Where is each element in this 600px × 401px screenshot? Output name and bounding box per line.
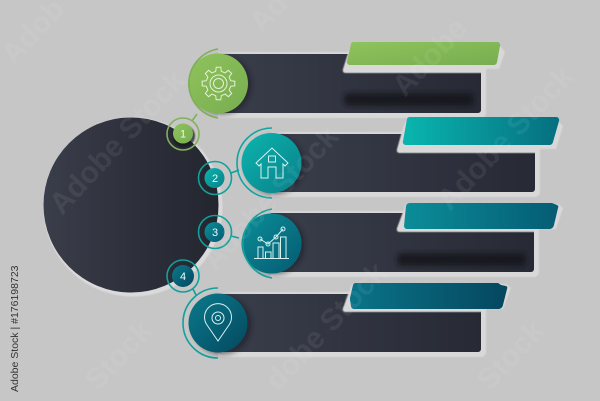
watermark: Adobe (386, 12, 474, 103)
connector lines (192, 114, 239, 295)
icon: map pin (204, 304, 232, 341)
teal title tab 3 (404, 203, 558, 229)
watermark: Stock (471, 314, 551, 397)
panel 1: green gear (218, 52, 486, 118)
watermark: Stock (79, 314, 159, 397)
text placeholder 1 (344, 93, 474, 106)
watermark: Adobe Stock (196, 120, 345, 277)
icon circle 2 (237, 128, 304, 198)
step 2 badge (198, 162, 232, 194)
step 3 badge (198, 216, 232, 248)
step 3 badge: 3 (212, 227, 218, 239)
icon: house (256, 148, 288, 178)
dark card 3 (271, 213, 534, 272)
panel 3: teal chart (271, 211, 539, 277)
central dark circle (44, 118, 222, 296)
step 1 badge (167, 118, 199, 150)
dark card 2 (271, 134, 535, 192)
icon: gear (202, 67, 235, 100)
side credit: Adobe Stock | #176198723 (9, 265, 21, 392)
watermark: Adobe Stock (43, 64, 192, 221)
text placeholder 3 (397, 253, 526, 266)
panel 4: dark teal location (218, 292, 486, 357)
step 4 badge: 4 (180, 271, 186, 283)
step 4 badge (167, 260, 199, 292)
watermark: dobe Stock (259, 256, 394, 397)
teal tab backing (397, 121, 563, 153)
green tab backing (343, 46, 505, 73)
icon circle 3 (242, 209, 304, 278)
panel 2: teal house (271, 132, 540, 197)
watermark: Adobe Stock (431, 60, 580, 217)
dark card 1 (218, 54, 481, 113)
dark teal tab backing (343, 284, 511, 312)
icon circle 4 (183, 288, 252, 358)
icon circle 1 (188, 49, 252, 118)
teal title tab (403, 117, 559, 145)
green title tab (347, 42, 500, 65)
step 1 badge: 1 (180, 128, 186, 140)
step 2 badge: 2 (212, 173, 218, 185)
dark card 4 (218, 294, 481, 352)
icon: bar chart (254, 227, 289, 258)
dark teal title tab (350, 283, 507, 309)
teal tab 3 backing (397, 204, 563, 232)
